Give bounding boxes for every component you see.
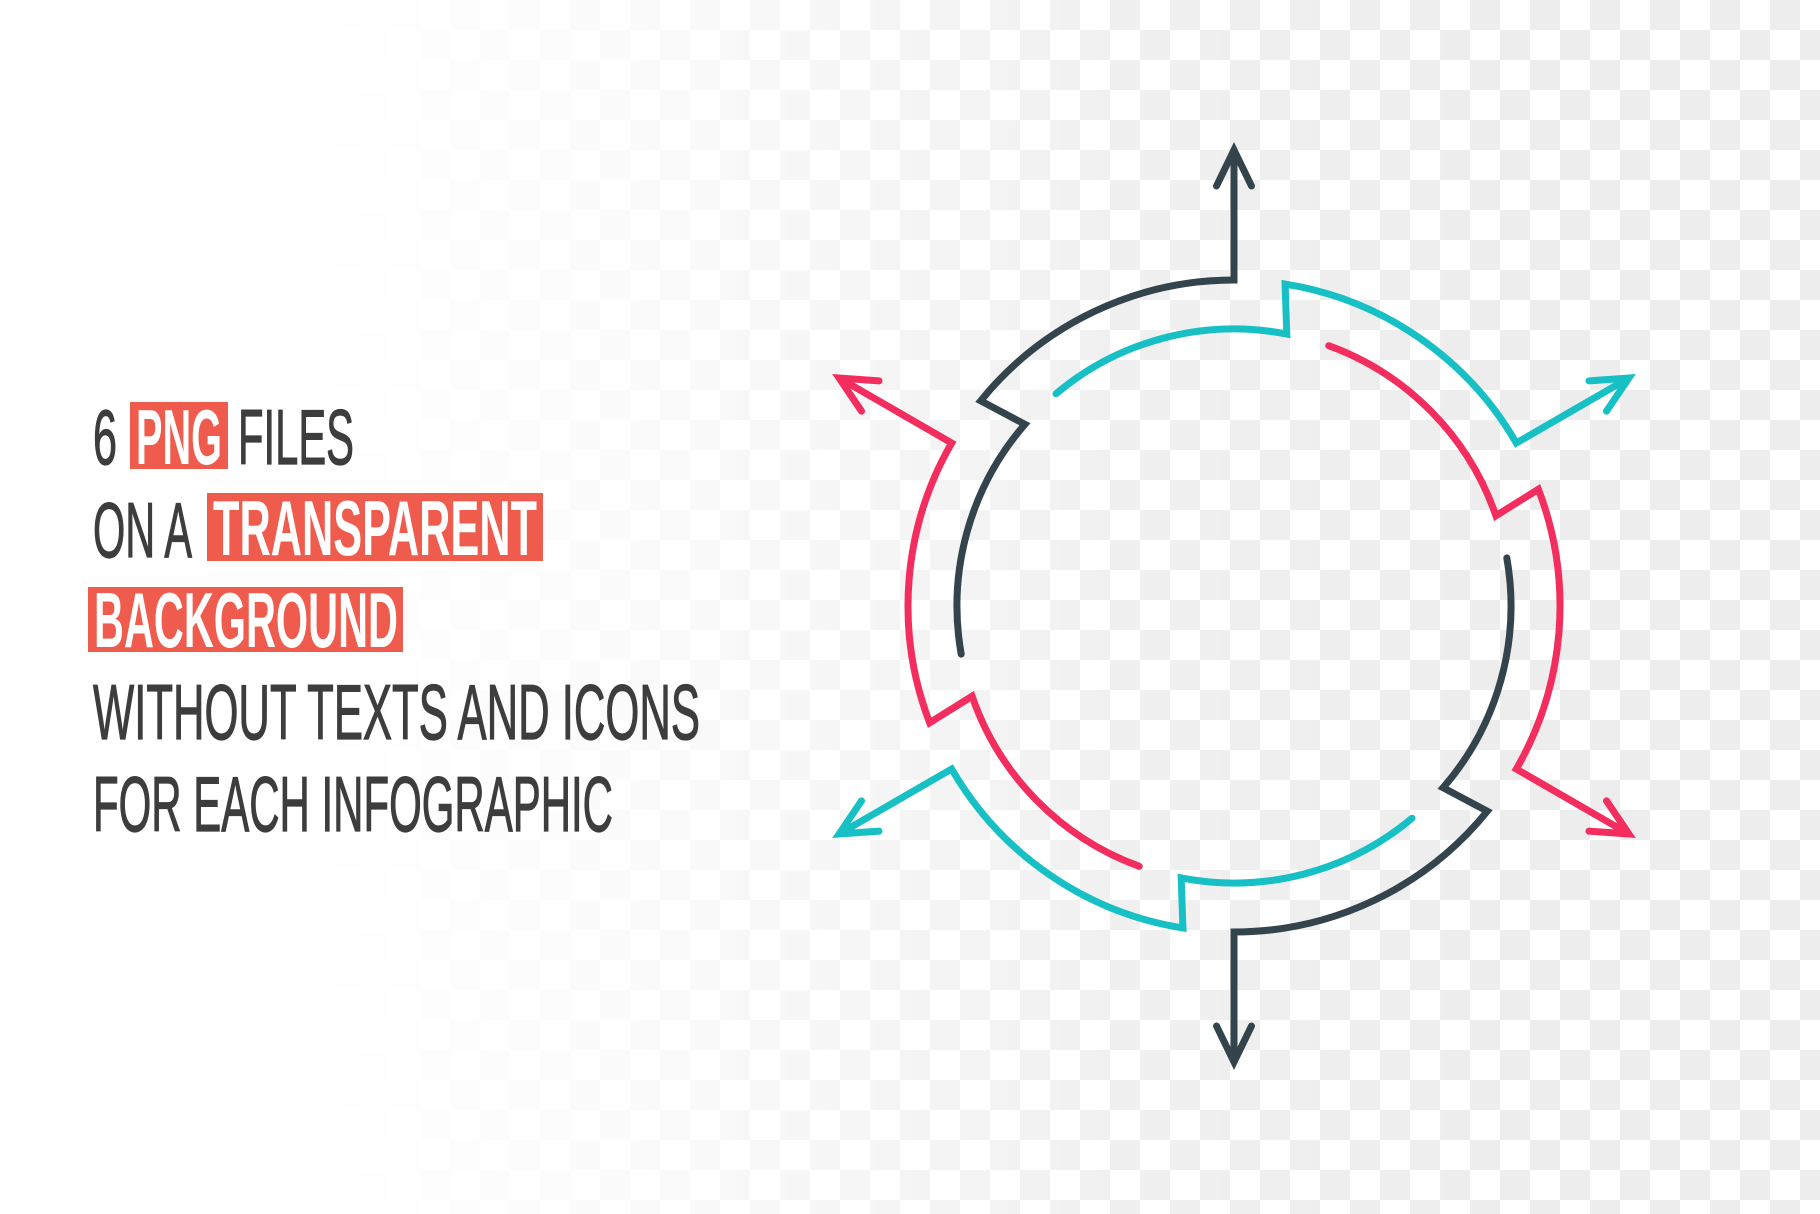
segment: lower-right red arrow [1184,342,1767,849]
segment: upper-right teal arrow [1054,138,1638,645]
line 3: BACKGROUND [94,576,398,664]
segment: upper-left red arrow [701,363,1284,870]
line 1: PNG [136,393,222,481]
line 5: FOR EACH INFOGRAPHIC [93,760,613,848]
text block: headline [88,393,700,848]
line 1: 6 [93,393,117,481]
line 4: WITHOUT TEXTS AND ICONS [93,668,700,756]
segment: top dark arrow [957,150,1252,654]
line 2: TRANSPARENT [213,484,537,572]
segment: lower-left teal arrow [830,567,1414,1074]
line 2 [93,484,543,574]
segment: bottom dark arrow [1216,558,1511,1062]
line 1: FILES [238,393,354,481]
line 3 [88,576,403,664]
line 2: ON A [93,486,192,574]
diagram: circular 6-arrow cycle [701,138,1767,1074]
line 1 [93,393,354,481]
